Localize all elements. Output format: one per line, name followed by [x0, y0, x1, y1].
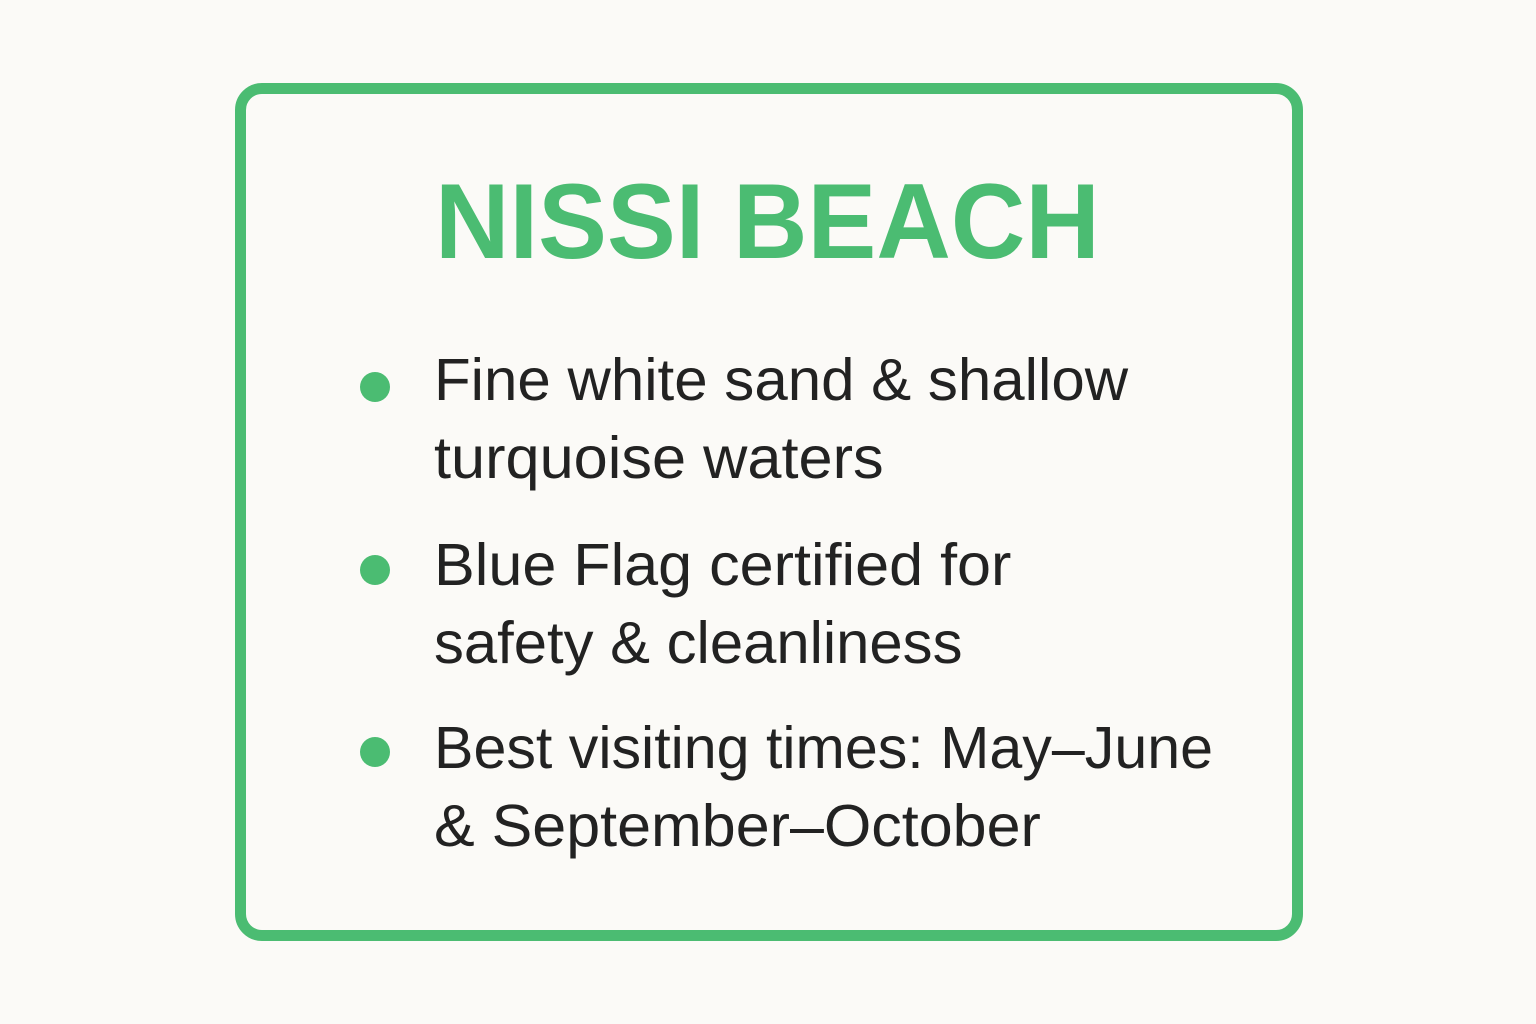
- title: NISSI BEACH: [435, 161, 1100, 281]
- icon: bullet 2: [360, 555, 390, 585]
- text block: bullet 3: & September–October: [434, 792, 1041, 859]
- text block: bullet 3: [434, 714, 1213, 859]
- text block: bullet 1: turquoise waters: [434, 424, 884, 491]
- icon: bullet 3: [360, 737, 390, 767]
- text block: bullet 1: Fine white sand & shallow: [434, 346, 1128, 413]
- icon: bullet 1: [360, 372, 390, 402]
- text block: bullet 2: Blue Flag certified for: [434, 531, 1011, 598]
- text block: bullet 1: [434, 346, 1128, 491]
- text block: bullet 2: safety & cleanliness: [434, 609, 962, 676]
- text block: bullet 3: Best visiting times: May–June: [434, 714, 1213, 781]
- panel: Nissi Beach card: [235, 83, 1303, 941]
- text block: bullet 2: [434, 531, 1011, 676]
